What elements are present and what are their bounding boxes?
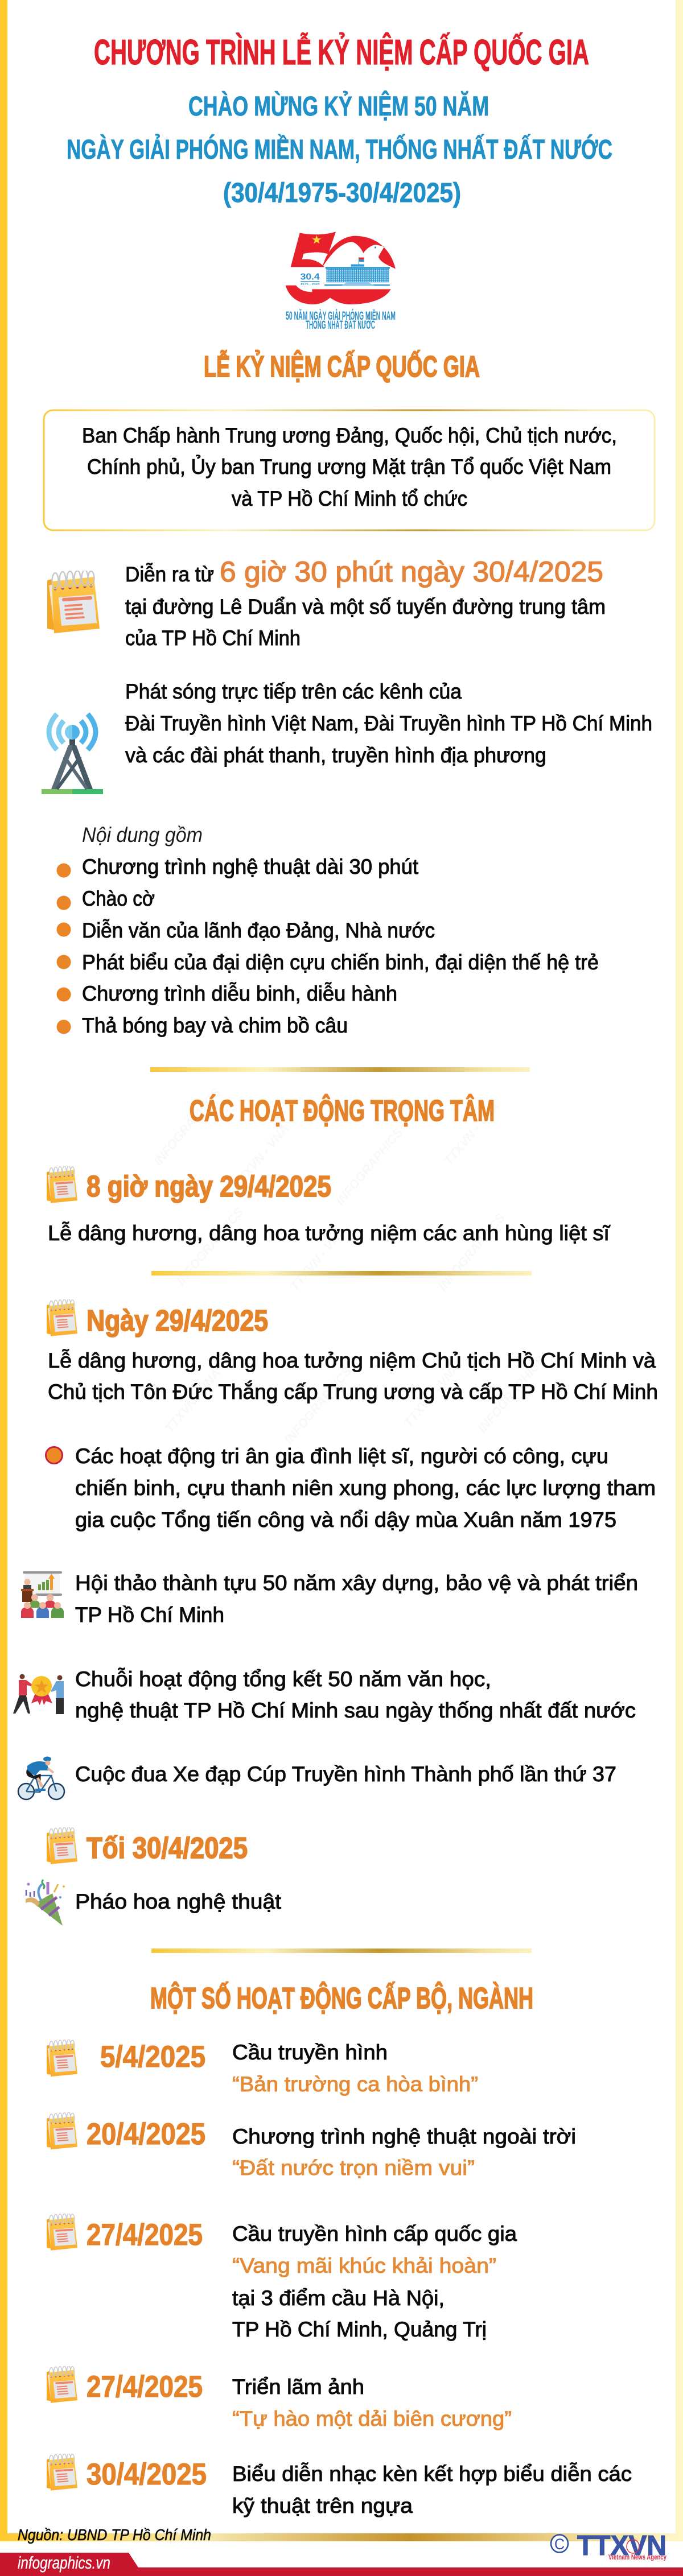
- panel: organisers: [44, 410, 655, 530]
- text block: programme list: Thả bóng bay và chim bồ câu: [82, 1013, 348, 1037]
- TTXVN logo: TTXVN: [577, 2530, 666, 2561]
- panel: organisers: Ban Chấp hành Trung ương Đảng, Quốc hội, Chủ tịch nước,: [82, 423, 617, 447]
- text: literature review: [75, 1667, 636, 1722]
- text block: programme list: Chương trình nghệ thuật dài 30 phút: [82, 854, 419, 878]
- watermark: TTXVN - VNA: [401, 1360, 463, 1430]
- text: conference: TP Hồ Chí Minh: [75, 1603, 224, 1626]
- watermark: INFOGRAPHICS: [435, 1211, 508, 1293]
- icon: 50th anniversary logo: 30.4: [301, 273, 320, 282]
- date heading: 29/4: Ngày 29/4/2025: [87, 1304, 268, 1337]
- right frame bar: [676, 0, 683, 2541]
- text block: broadcast: Đài Truyền hình Việt Nam, Đài Truyền hình TP Hồ Chí Minh: [125, 711, 652, 735]
- row: 5/4/2025: 5/4/2025: [100, 2040, 205, 2074]
- row: 30/4/2025: [47, 2454, 632, 2517]
- text: gratitude activities: gia cuộc Tổng tiến công và nổi dậy mùa Xuân năm 1975: [75, 1508, 616, 1531]
- text: literature review: Chuỗi hoạt động tổng kết 50 năm văn học,: [75, 1667, 491, 1691]
- icon: 50th anniversary logo: 1975 - 2025: [301, 283, 320, 286]
- icon: party popper: [26, 1880, 65, 1926]
- icon: bullet: [46, 1447, 63, 1463]
- watermark: TTXVN - VNA: [231, 1121, 292, 1191]
- icon: calendar 30/4 evening: [47, 1827, 77, 1864]
- row: 27/4/2025 photo exhibition: [47, 2366, 512, 2430]
- icon: cyclist: [18, 1757, 64, 1799]
- text: conference: [75, 1571, 638, 1626]
- date heading: evening 30/4: Tối 30/4/2025: [87, 1832, 248, 1865]
- watermark: TTXVN - VNA: [287, 1224, 349, 1293]
- row: 5/4/2025: [47, 2040, 478, 2096]
- row: 5/4/2025: Cầu truyền hình: [232, 2040, 388, 2064]
- text: fireworks: Pháo hoa nghệ thuật: [75, 1889, 282, 1913]
- heading: national ceremony: LỄ KỶ NIỆM CẤP QUỐC GIA: [204, 350, 480, 383]
- text: cycling race: Cuộc đua Xe đạp Cúp Truyền hình Thành phố lần thứ 37: [75, 1762, 616, 1786]
- watermark: INFOGRAPHICS: [174, 1205, 246, 1287]
- row: 27/4/2025 national bridge: tại 3 điểm cầu Hà Nội,: [232, 2286, 445, 2310]
- icon: calendar 8h: [47, 1166, 77, 1203]
- text: incense offering martyrs: Lễ dâng hương, dâng hoa tưởng niệm các anh hùng liệt sĩ: [48, 1221, 611, 1245]
- text: 50 NĂM NGÀY GIẢI PHÓNG MIỀN NAM: [286, 309, 396, 323]
- text block: programme list: Chào cờ: [82, 886, 155, 910]
- row: 27/4/2025 photo exhibition: Triển lãm ảnh: [232, 2375, 364, 2399]
- text block: programme list: Phát biểu của đại diện cựu chiến binh, đại diện thế hệ trẻ: [82, 950, 599, 974]
- TTXVN logo: C: [554, 2536, 565, 2553]
- footer band: infographics.vn: [18, 2553, 110, 2573]
- row: 20/4/2025: Chương trình nghệ thuật ngoài trời: [232, 2124, 576, 2148]
- row: 27/4/2025 photo exhibition: “Tự hào một dải biên cương”: [232, 2406, 512, 2430]
- row: 5/4/2025: “Bản trường ca hòa bình”: [232, 2072, 478, 2096]
- text: incense offering leaders: [48, 1348, 658, 1403]
- panel: organisers: và TP Hồ Chí Minh tổ chức: [232, 486, 467, 510]
- icon: 50th anniversary logo: [286, 232, 396, 304]
- watermark: [151, 1085, 548, 1447]
- text block: broadcast: [125, 679, 652, 767]
- text block: programme list: [57, 823, 599, 1037]
- text block: time and venue: 6 giờ 30 phút ngày 30/4/2025: [220, 556, 603, 588]
- text block: time and venue: của TP Hồ Chí Minh: [125, 626, 301, 650]
- text block: broadcast: và các đài phát thanh, truyền hình địa phương: [125, 743, 546, 767]
- row: 27/4/2025 photo exhibition: 27/4/2025: [87, 2370, 203, 2404]
- icon: calendar 29/4: [47, 1299, 77, 1336]
- logo caption: THỐNG NHẤT ĐẤT NƯỚC: [306, 318, 375, 332]
- icon: award: [13, 1674, 64, 1714]
- text: conference: Hội thảo thành tựu 50 năm xây dựng, bảo vệ và phát triển: [75, 1571, 638, 1595]
- icon: conference: [21, 1571, 64, 1618]
- watermark: INFOGRAPHICS: [282, 1364, 354, 1447]
- left frame bar: [0, 0, 7, 2541]
- date heading: 8h 29/4: 8 giờ ngày 29/4/2025: [87, 1170, 331, 1203]
- text block: programme list: Chương trình diễu binh, diễu hành: [82, 981, 397, 1005]
- text block: time and venue: [125, 556, 606, 650]
- watermark: INFOGRAPHICS: [333, 1125, 405, 1208]
- text: incense offering leaders: Chủ tịch Tôn Đức Thắng cấp Trung ương và cấp TP Hồ Chí Minh: [48, 1380, 658, 1403]
- row: 27/4/2025 national bridge: [47, 2214, 517, 2341]
- row: 27/4/2025 national bridge: TP Hồ Chí Minh, Quảng Trị: [232, 2317, 487, 2341]
- subtitle: [67, 90, 612, 208]
- row: 27/4/2025 national bridge: 27/4/2025: [87, 2218, 203, 2252]
- watermark: TTXVN - VNA: [162, 1366, 224, 1435]
- text: literature review: nghệ thuật TP Hồ Chí Minh sau ngày thống nhất đất nước: [75, 1698, 636, 1722]
- row: 20/4/2025: 20/4/2025: [87, 2117, 205, 2151]
- text: gratitude activities: Các hoạt động tri ân gia đình liệt sĩ, người có công, cựu: [75, 1444, 608, 1468]
- text block: programme list: Diễn văn của lãnh đạo Đảng, Nhà nước: [82, 918, 435, 942]
- footer band: [0, 2553, 683, 2576]
- subtitle: (30/4/1975-30/4/2025): [223, 178, 461, 208]
- panel: organisers: Chính phủ, Ủy ban Trung ương Mặt trận Tổ quốc Việt Nam: [87, 455, 611, 478]
- row: 20/4/2025: “Đất nước trọn niềm vui”: [232, 2156, 475, 2179]
- logo caption: [286, 309, 396, 332]
- subtitle: CHÀO MỪNG KỶ NIỆM 50 NĂM: [188, 90, 489, 122]
- text block: time and venue: Diễn ra từ: [125, 562, 214, 586]
- text block: broadcast: Phát sóng trực tiếp trên các kênh của: [125, 679, 462, 703]
- text: gratitude activities: chiến binh, cựu thanh niên xung phong, các lực lượng tham: [75, 1476, 656, 1500]
- row: 30/4/2025: Biểu diễn nhạc kèn kết hợp biểu diễn các: [232, 2462, 632, 2486]
- icon: calendar large: [47, 570, 100, 633]
- icon: broadcast tower: [42, 714, 103, 794]
- text: gratitude activities: [75, 1444, 656, 1531]
- text block: programme list: Nội dung gồm: [82, 823, 203, 847]
- text block: time and venue: tại đường Lê Duẩn và một số tuyến đường trung tâm: [125, 595, 606, 618]
- watermark: TTXVN - VNA: [441, 1099, 503, 1168]
- text: incense offering leaders: Lễ dâng hương, dâng hoa tưởng niệm Chủ tịch Hồ Chí Minh và: [48, 1348, 656, 1372]
- row: 20/4/2025: [47, 2112, 576, 2179]
- watermark: INFOGRAPHICS: [475, 1353, 548, 1435]
- row: 27/4/2025 national bridge: Cầu truyền hình cấp quốc gia: [232, 2222, 517, 2245]
- source: Nguồn: UBND TP Hồ Chí Minh: [18, 2526, 211, 2544]
- row: 30/4/2025: 30/4/2025: [87, 2458, 207, 2491]
- row: 30/4/2025: kỹ thuật trên ngựa: [232, 2494, 413, 2517]
- row: 27/4/2025 national bridge: “Vang mãi khúc khải hoàn”: [232, 2253, 496, 2277]
- watermark: INFOGRAPHICS: [151, 1085, 223, 1168]
- heading: key activities: CÁC HOẠT ĐỘNG TRỌNG TÂM: [190, 1094, 495, 1128]
